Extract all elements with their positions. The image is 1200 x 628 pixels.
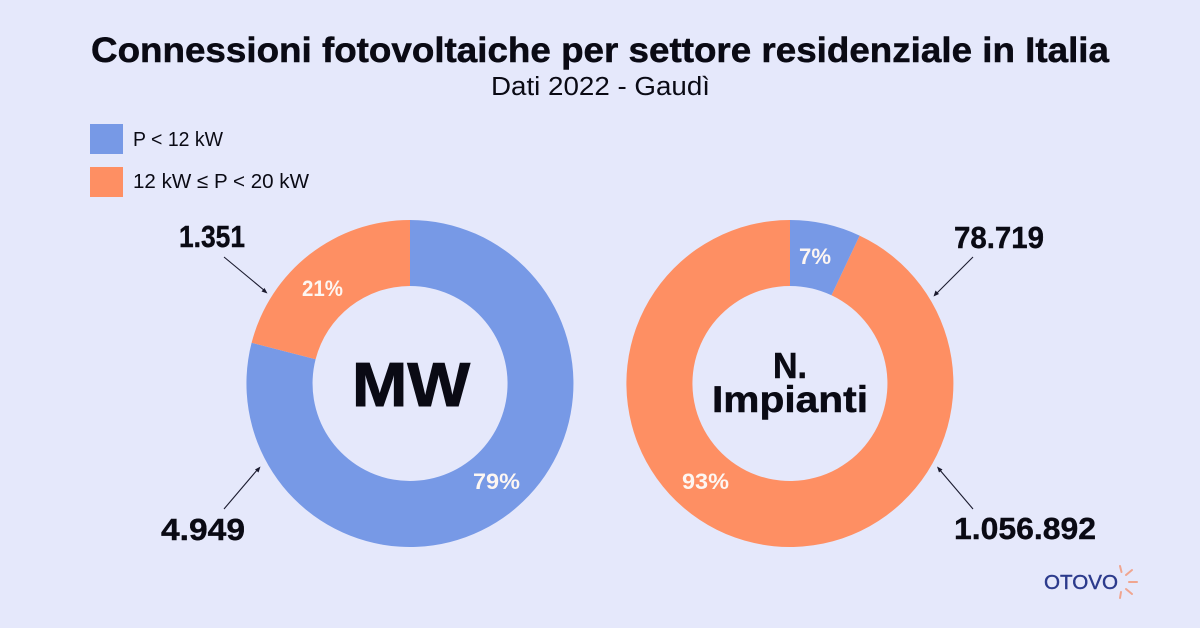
arrow to orange segment MW <box>224 257 268 294</box>
legend item: P < 12 kW <box>90 124 224 154</box>
center label N. Impianti: N. <box>773 345 807 386</box>
value 1.056.892: 1.056.892 <box>954 511 1096 546</box>
donut chart: N. Impianti <box>626 220 953 547</box>
title: Connessioni fotovoltaiche per settore residenziale in Italia <box>91 31 1110 70</box>
legend item: 12 kW ≤ P < 20 kW <box>90 167 310 197</box>
percent label 79%: 79% <box>473 469 520 494</box>
icon: sun rays <box>1120 566 1137 598</box>
logo: OTOVO: OTOVO <box>1044 572 1118 594</box>
center label MW: MW <box>352 351 471 420</box>
arrow to orange segment impianti top <box>934 257 973 296</box>
donut chart: MW <box>246 220 573 547</box>
percent label 21%: 21% <box>302 276 343 301</box>
logo: OTOVO <box>1044 566 1137 598</box>
subtitle: Dati 2022 - Gaudì <box>491 73 710 101</box>
segment: P < 12 kW 7% <box>790 220 860 295</box>
percent label 7%: 7% <box>799 244 831 269</box>
legend <box>90 124 310 197</box>
arrow to blue segment MW <box>224 466 260 509</box>
arrow to orange segment impianti bottom <box>937 466 973 509</box>
segment: P < 12 kW 79% <box>246 220 573 547</box>
value 4.949: 4.949 <box>161 512 245 547</box>
segment: 12 kW ≤ P < 20 kW 93% <box>626 220 953 547</box>
legend item: P < 12 kW: P < 12 kW <box>133 128 224 151</box>
center label N. Impianti: Impianti <box>712 379 868 420</box>
percent label 93%: 93% <box>682 469 729 494</box>
value 1.351: 1.351 <box>179 219 245 254</box>
legend item: 12 kW ≤ P < 20 kW: 12 kW ≤ P < 20 kW <box>133 170 310 193</box>
segment: 12 kW ≤ P < 20 kW 21% <box>252 220 410 359</box>
center label N. Impianti <box>712 345 868 420</box>
value 78.719: 78.719 <box>954 220 1044 255</box>
